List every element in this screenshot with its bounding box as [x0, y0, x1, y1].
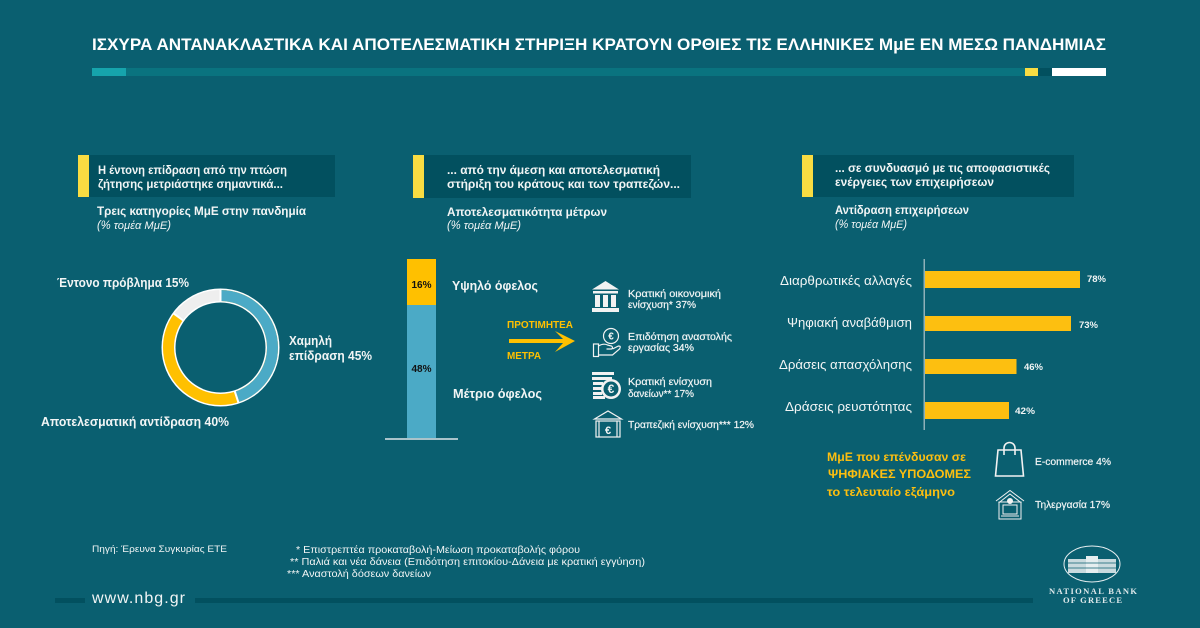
item: e-commerce: E-commerce 4% [1035, 457, 1111, 468]
icon: coins with euro: € [608, 382, 615, 396]
title: ΙΣΧΥΡΑ ΑΝΤΑΝΑΚΛΑΣΤΙΚΑ ΚΑΙ ΑΠΟΤΕΛΕΣΜΑΤΙΚΗ ΣΤΗΡΙΞΗ ΚΡΑΤΟΥΝ ΟΡΘΙΕΣ ΤΙΣ ΕΛΛΗΝΙΚΕΣ ΜμΕ ΕΝ ΜΕΣΩ ΠΑΝΔΗΜΙΑΣ [92, 35, 1106, 54]
icon: bank outline with euro: € [605, 425, 611, 437]
heading: measures: ... από την άμεση και αποτελεσματική [447, 165, 660, 177]
logo: National Bank of Greece: OF GREECE [1063, 595, 1122, 605]
subheading: impact [97, 206, 306, 232]
callout: digital infrastructure investment: το τελευταίο εξάμηνο [827, 487, 955, 499]
arrow: preferred measures: ΜΕΤΡΑ [507, 350, 541, 362]
icon: bank [592, 281, 619, 312]
label: high benefit: Υψηλό όφελος [452, 279, 538, 293]
label: medium benefit: Μέτριο όφελος [453, 387, 542, 401]
donut chart [162, 288, 280, 406]
bar: employment actions: 46% [1024, 362, 1044, 373]
heading: impact: Η έντονη επίδραση από την πτώση [98, 165, 287, 177]
measure: state financial support [592, 281, 721, 312]
heading: business response: ενέργειες των επιχειρήσεων [835, 177, 994, 189]
heading: impact [78, 155, 335, 197]
bar: liquidity actions: 42% [1015, 406, 1036, 417]
item: telework: Τηλεργασία 17% [1035, 499, 1110, 511]
subheading: business response: Αντίδραση επιχειρήσεων [835, 205, 969, 217]
bar: structural changes: Διαρθρωτικές αλλαγές [780, 274, 912, 288]
header bar [92, 68, 1106, 76]
item: telework [996, 490, 1110, 519]
icon: house with laptop [996, 490, 1024, 519]
bar: employment actions [779, 358, 1044, 374]
stacked bar chart [385, 259, 458, 440]
footer line [55, 598, 1033, 603]
measure: work suspension subsidy: Επιδότηση αναστολής [628, 331, 732, 343]
footnotes: * Επιστρεπτέα προκαταβολή-Μείωση προκαταβολής φόρου [296, 544, 580, 556]
measure: work suspension subsidy: εργασίας 34% [628, 342, 694, 354]
panel: business response [779, 155, 1111, 519]
bar: employment actions: Δράσεις απασχόλησης [779, 358, 912, 372]
measure: state loan support [592, 372, 712, 400]
panel: measures [385, 155, 754, 440]
donut label: low impact [289, 334, 372, 363]
subheading: impact: (% τομέα ΜμΕ) [97, 220, 171, 232]
bar: digital upgrade: Ψηφιακή αναβάθμιση [787, 316, 912, 330]
arrow: preferred measures: ΠΡΟΤΙΜΗΤΕΑ [507, 319, 573, 331]
callout: digital infrastructure investment: ΨΗΦΙΑΚΕΣ ΥΠΟΔΟΜΕΣ [828, 469, 971, 481]
footnotes: ** Παλιά και νέα δάνεια (Επιδότηση επιτοκίου-Δάνεια με κρατική εγγύηση) [290, 556, 645, 568]
donut label: severe problem: Έντονο πρόβλημα 15% [57, 276, 189, 290]
donut label: low impact: επίδραση 45% [289, 349, 372, 363]
bar: liquidity actions [785, 400, 1036, 419]
callout: digital infrastructure investment [827, 452, 971, 499]
bar: digital upgrade: 73% [1079, 320, 1099, 331]
stacked bar chart: 16% [411, 280, 432, 291]
bar chart [779, 259, 1107, 430]
arrow: preferred measures [507, 319, 575, 362]
bar: liquidity actions: Δράσεις ρευστότητας [785, 400, 912, 414]
subheading: measures: Αποτελεσματικότητα μέτρων [447, 207, 607, 219]
measure: work suspension subsidy [594, 328, 732, 356]
bar: structural changes: 78% [1087, 274, 1107, 285]
callout: digital infrastructure investment: ΜμΕ που επένδυσαν σε [827, 452, 967, 464]
measure: state financial support: Κρατική οικονομική [628, 288, 721, 300]
item: e-commerce [996, 442, 1111, 476]
heading: business response: ... σε συνδυασμό με τις αποφασιστικές [835, 163, 1050, 175]
subheading: measures: (% τομέα ΜμΕ) [447, 220, 521, 232]
icon: hand with euro coin: € [608, 332, 614, 342]
logo: National Bank of Greece [1049, 546, 1137, 605]
subheading: impact: Τρεις κατηγορίες ΜμΕ στην πανδημία [97, 206, 306, 218]
logo: National Bank of Greece: NATIONAL BANK [1049, 586, 1137, 596]
icon: shopping bag [996, 442, 1024, 476]
measure: bank support [594, 411, 754, 437]
measure: bank support: Τραπεζική ενίσχυση*** 12% [628, 419, 754, 431]
subheading: business response [835, 205, 969, 231]
source note: Πηγή: Έρευνα Συγκυρίας ΕΤΕ [92, 544, 227, 555]
measure: state loan support: δανείων** 17% [628, 388, 694, 400]
heading: business response [802, 155, 1074, 197]
measure: state loan support: Κρατική ενίσχυση [628, 376, 712, 388]
subheading: measures [447, 207, 607, 232]
icon: bank outline with euro [594, 411, 622, 437]
donut label: effective response: Αποτελεσματική αντίδραση 40% [41, 415, 229, 429]
website: www.nbg.gr [91, 590, 186, 607]
heading: measures [413, 155, 691, 198]
bar: structural changes [780, 271, 1107, 288]
heading: measures: στήριξη του κράτους και των τραπεζών... [447, 179, 680, 191]
measure: state financial support: ενίσχυση* 37% [628, 299, 696, 311]
donut label: low impact: Χαμηλή [289, 334, 332, 348]
subheading: business response: (% τομέα ΜμΕ) [835, 219, 907, 231]
bar: digital upgrade [787, 316, 1099, 331]
footnotes [287, 544, 645, 580]
footnotes: *** Αναστολή δόσεων δανείων [287, 568, 431, 580]
heading: impact: ζήτησης μετριάστηκε σημαντικά... [98, 179, 283, 191]
stacked bar chart: 48% [411, 364, 432, 375]
panel: impact [41, 155, 372, 429]
